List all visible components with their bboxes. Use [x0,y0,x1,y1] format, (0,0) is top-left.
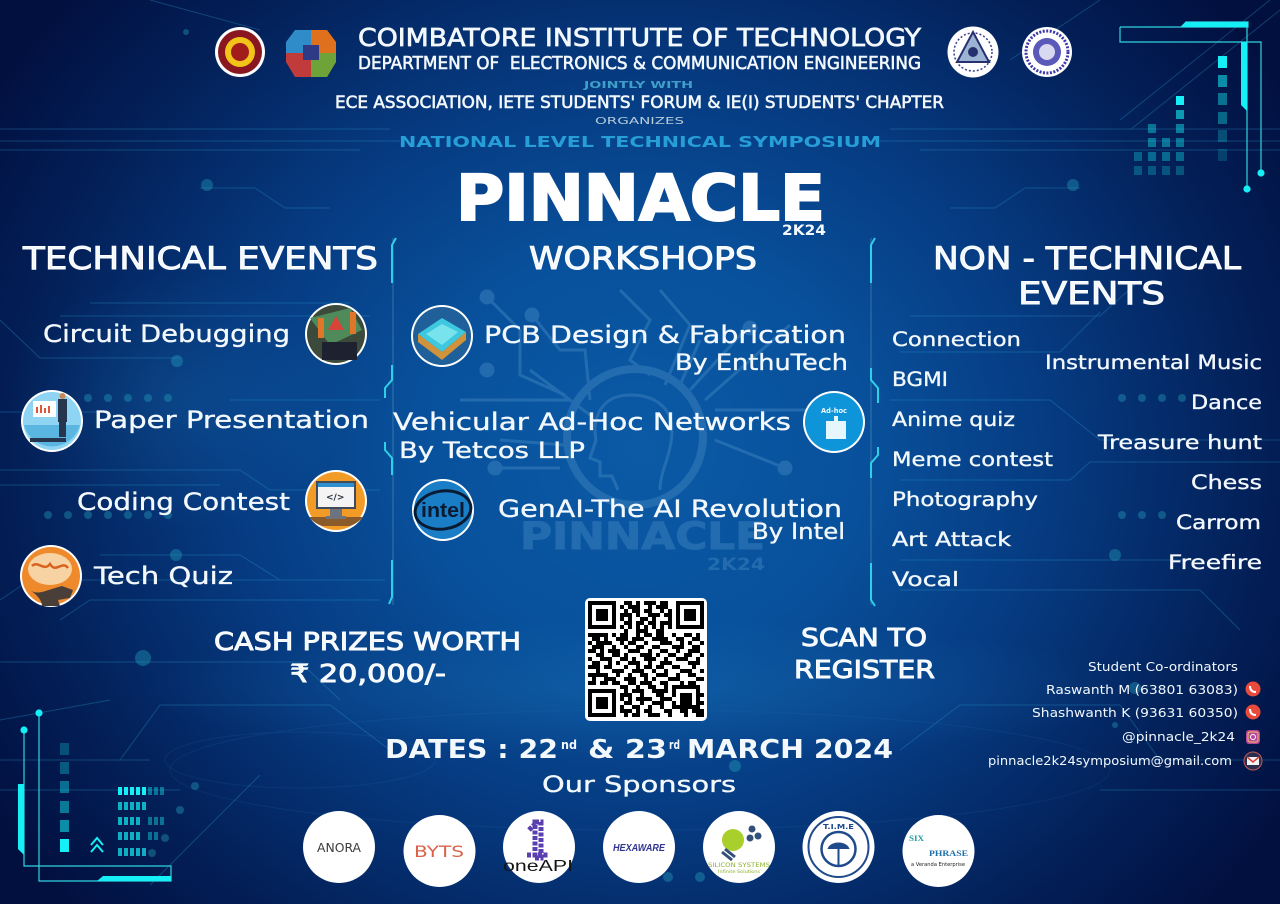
workshop: genai: GenAI-The AI Revolution [498,495,842,523]
title: PINNACLE [456,162,825,235]
coordinator text: @pinnacle_2k24 [1122,729,1235,744]
scan to register [794,623,935,684]
sponsor: six phrase: SIX [909,834,924,843]
logo: IE(I) [1022,27,1072,77]
logo: IETE [948,26,998,78]
sponsor: silicon systems [703,811,775,883]
central circuit head watermark [460,290,840,575]
sponsor: anora: ANORA [317,841,362,855]
sponsor logos [303,811,974,887]
list: left column: Photography [892,488,1038,511]
event: paper presentation [21,390,369,452]
list: left column: Art Attack [892,528,1012,551]
list: right column: Freefire [1168,551,1262,574]
cash prizes [214,627,521,688]
sponsor: hexaware [603,811,675,883]
workshop: vehicular ad-hoc networks: Vehicular Ad-Hoc Networks [393,408,791,436]
header: institution name: DEPARTMENT OF ELECTRONICS & COMMUNICATION ENGINEERING [358,54,921,74]
coordinator text [988,659,1238,768]
workshop: vehicular ad-hoc networks: Ad-hoc [821,407,847,415]
event: circuit debugging: Circuit Debugging [43,320,290,348]
icon: phone [1246,704,1260,720]
workshop: pcb design: PCB Design & Fabrication [484,321,846,349]
list: left column: Anime quiz [892,408,1015,431]
sponsor: byts: BYTS [414,842,464,861]
corner decoration: top right [1120,22,1265,193]
coordinator text: Student Co-ordinators [1088,659,1238,674]
sponsor: oneapi [503,811,575,883]
heading: workshops: WORKSHOPS [529,241,757,277]
logo: ECE association [286,30,336,77]
central circuit head watermark: PINNACLE [520,515,765,558]
corner decoration: bottom left [18,709,171,881]
list: left column: BGMI [892,368,948,391]
icon: instagram [1246,730,1260,744]
sponsor: oneapi: oneAPI [503,858,573,875]
list: right column: Chess [1191,471,1262,494]
workshop: genai [412,479,845,545]
workshop: pcb design [411,305,848,376]
sponsor: byts [404,815,476,887]
event: tech quiz: Tech Quiz [93,562,233,590]
dates: & 23 [588,735,667,765]
dates: DATES : 22 [385,735,558,765]
sponsor: six phrase [902,815,974,887]
sponsor: t.i.m.e.: T.I.M.E [823,823,854,831]
student coordinators [988,659,1262,770]
list: left column: Vocal [892,568,959,591]
sponsor: six phrase: a Veranda Enterprise [911,862,966,868]
panel: workshops [393,241,865,545]
list: right column [1045,351,1262,574]
workshop: vehicular ad-hoc networks: By Tetcos LLP [399,439,585,464]
workshop: genai: intel [421,500,465,522]
header: jointly with: NATIONAL LEVEL TECHNICAL SYMPOSIUM [399,133,881,151]
sponsors heading: Our Sponsors [542,773,736,798]
icon: phone [1246,682,1260,696]
sponsor: six phrase: PHRASE [929,849,968,858]
header: jointly with [335,80,944,151]
sponsor: hexaware: HEXAWARE [613,843,665,854]
header: jointly with: ECE ASSOCIATION, IETE STUDENTS' FORUM & IE(I) STUDENTS' CHAPTER [335,93,944,113]
list: right column: Carrom [1176,511,1261,534]
list: left column [892,328,1053,591]
sponsor: anora [303,811,375,883]
heading: non-technical events: EVENTS [1018,276,1165,312]
cash prizes: ₹ 20,000/- [290,659,446,688]
title: 2K24 [782,223,826,239]
list: right column: Dance [1191,391,1262,414]
coordinator text: Raswanth M (63801 63083) [1046,682,1238,697]
scan to register: REGISTER [794,655,935,684]
event: tech quiz [20,545,233,607]
bracket dividers [385,238,878,606]
list: right column: Instrumental Music [1045,351,1262,374]
event: coding contest: </> [326,493,344,503]
header: jointly with: JOINTLY WITH [583,80,693,91]
panel: technical events [20,241,378,607]
coordinator text: Shashwanth K (93631 60350) [1032,705,1238,720]
cash prizes: CASH PRIZES WORTH [214,627,521,656]
logo: institute seal [215,27,265,77]
sponsor: silicon systems: Infinite Solutions [718,869,760,874]
list: right column: Treasure hunt [1097,431,1262,454]
dates: MARCH 2024 [687,735,893,765]
qr code [585,598,707,721]
icon: email [1244,752,1262,770]
list: left column: Meme contest [892,448,1053,471]
workshop: pcb design: By EnthuTech [675,351,848,376]
workshop: genai: By Intel [752,520,845,545]
sponsor: t.i.m.e. [802,811,874,883]
event: paper presentation: Paper Presentation [94,406,369,434]
dates: nd [561,738,577,752]
dates: rd [669,738,680,752]
header: institution name: COIMBATORE INSTITUTE OF TECHNOLOGY [358,23,922,52]
event: coding contest [77,470,367,532]
header: jointly with: ORGANIZES [595,116,684,127]
event: circuit debugging [43,303,367,365]
sponsor: silicon systems: SILICON SYSTEMS [708,861,770,869]
central circuit head watermark: 2K24 [707,555,765,575]
heading: technical events: TECHNICAL EVENTS [22,241,378,277]
coordinator text: pinnacle2k24symposium@gmail.com [988,753,1232,768]
event: coding contest: Coding Contest [77,488,290,516]
panel: non-technical events [892,241,1262,591]
workshop: vehicular ad-hoc networks [393,391,865,464]
scan to register: SCAN TO [801,623,927,652]
list: left column: Connection [892,328,1021,351]
heading: non-technical events: NON - TECHNICAL [933,241,1242,277]
header: institution name [358,23,922,74]
dates [385,735,893,765]
heading: non-technical events [933,241,1242,312]
